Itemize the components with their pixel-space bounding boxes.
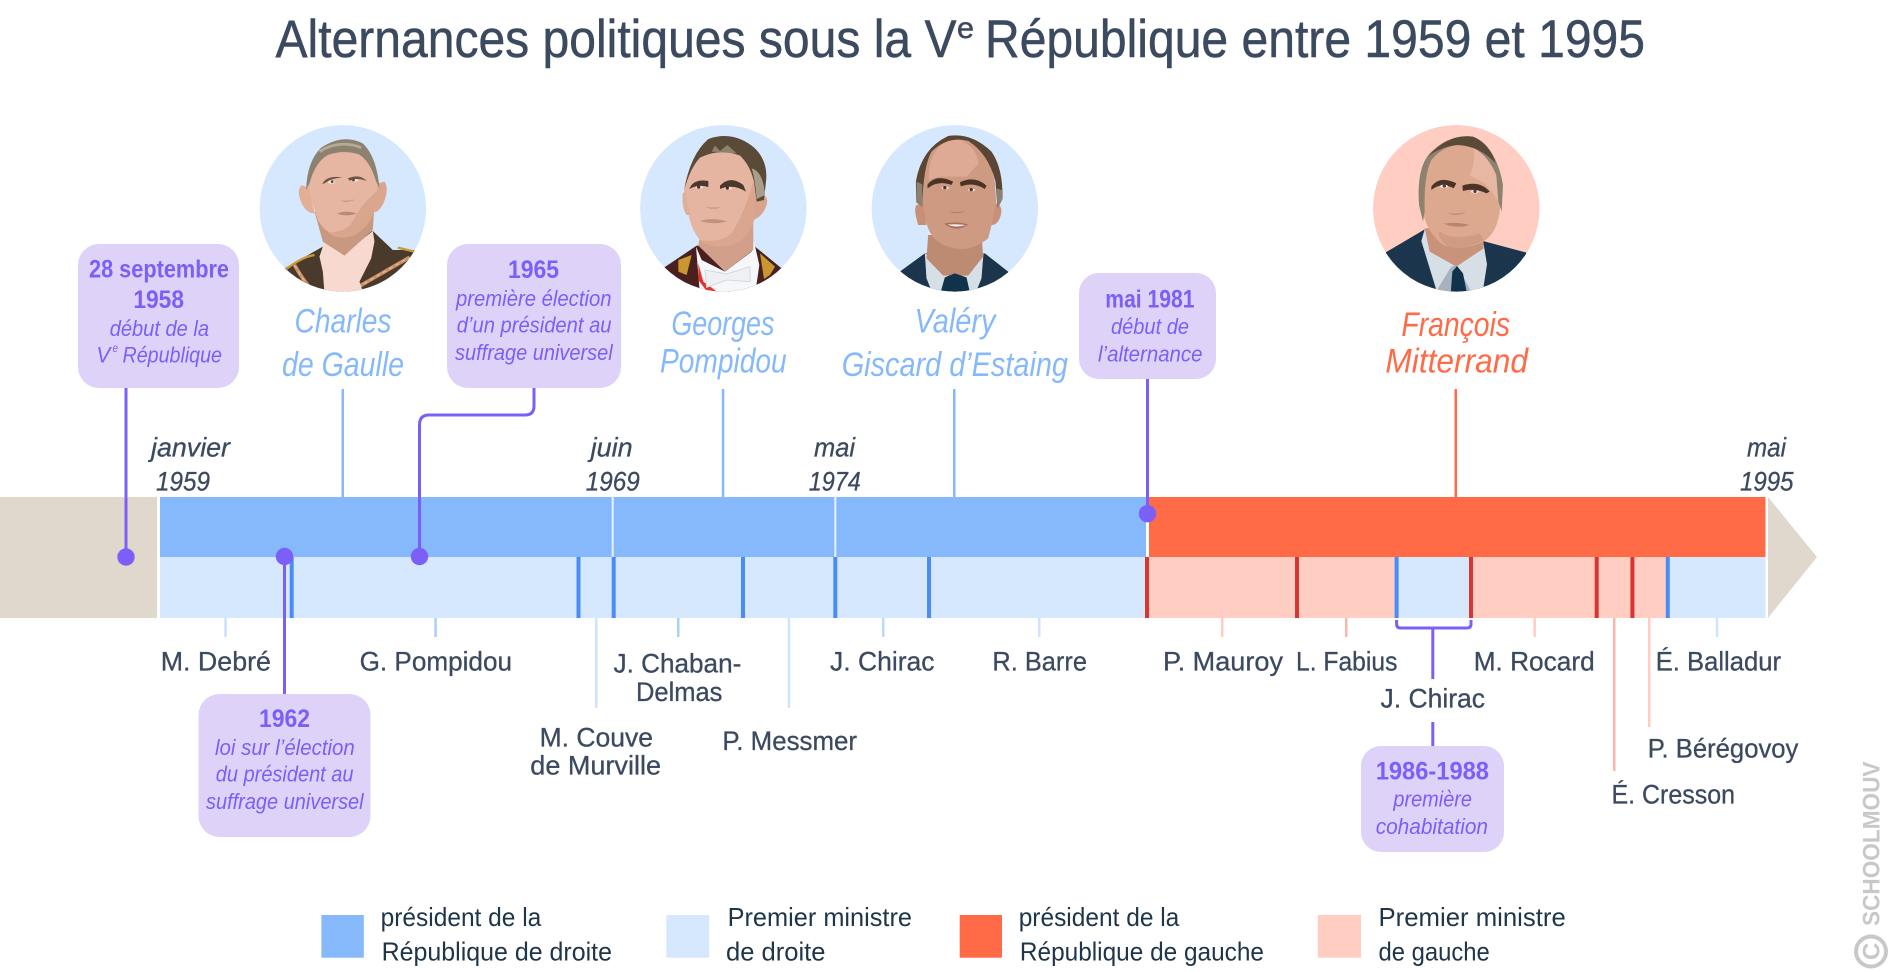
callout: 1965: d’un président au <box>457 313 612 338</box>
prime minister names: M. Couve <box>540 723 653 753</box>
callout: 1986-1988: cohabitation <box>1376 814 1488 839</box>
legend: Premier ministre de gauche: Premier ministre <box>1378 902 1566 932</box>
watermark: SCHOOLMOUV: C <box>1858 943 1886 960</box>
callout: mai 1981 <box>1079 273 1216 379</box>
callout: 1962 <box>198 694 370 837</box>
name: François Mitterrand: François <box>1401 306 1510 344</box>
callout: 1986-1988 <box>1361 746 1504 852</box>
title: e <box>957 12 974 45</box>
title: Alternances politiques sous la V <box>276 10 957 69</box>
prime minister names: J. Chirac <box>1380 684 1485 714</box>
prime minister ticks <box>224 618 1718 771</box>
callout: mai 1981: début de <box>1111 314 1189 339</box>
prime minister names: P. Messmer <box>722 726 857 756</box>
legend: président de gauche: président de la <box>1019 902 1180 932</box>
portrait: Valéry Giscard d'Estaing <box>872 125 1038 295</box>
date labels: 1995 <box>1740 467 1794 497</box>
name: François Mitterrand: Mitterrand <box>1385 343 1529 381</box>
callout: 1962: loi sur l’élection <box>215 735 355 760</box>
name: François Mitterrand <box>1385 306 1529 381</box>
connector: Mitterrand <box>1454 389 1457 497</box>
callout: mai 1981: l’alternance <box>1098 342 1202 367</box>
date labels <box>147 433 1794 497</box>
prime minister names: P. Bérégovoy <box>1648 733 1799 763</box>
portrait: Charles de Gaulle <box>260 125 426 295</box>
legend: Premier ministre de gauche: de gauche <box>1378 937 1490 967</box>
president band: right <box>160 497 1146 557</box>
title <box>276 10 1645 69</box>
title: République entre 1959 et 1995 <box>985 10 1645 69</box>
legend: président de droite: République de droite <box>382 937 612 967</box>
prime minister names: R. Barre <box>992 647 1087 677</box>
portrait: Georges Pompidou <box>640 125 807 295</box>
timeline bar <box>0 497 1817 618</box>
watermark: SCHOOLMOUV <box>1856 762 1886 966</box>
watermark: SCHOOLMOUV: SCHOOLMOUV <box>1858 762 1886 926</box>
legend: président de droite <box>321 902 612 967</box>
date labels: janvier <box>147 433 231 463</box>
prime minister names: J. Chaban- <box>614 649 741 679</box>
prime minister names: de Murville <box>530 750 661 780</box>
prime minister band <box>160 557 1766 618</box>
prime minister names: M. Rocard <box>1474 647 1595 677</box>
prime minister names <box>161 647 1799 809</box>
date labels: 1974 <box>809 467 861 497</box>
name: Georges Pompidou: Pompidou <box>660 343 787 381</box>
callout: 1965: 1965 <box>508 256 559 284</box>
name: Georges Pompidou: Georges <box>671 305 774 343</box>
arrow head <box>1768 497 1817 618</box>
callout: 28 septembre 1958 <box>78 244 239 388</box>
portrait: François Mitterrand <box>1373 125 1540 295</box>
president separators <box>612 497 836 557</box>
connector: 1962 <box>276 548 293 694</box>
callout: 1962: suffrage universel <box>206 789 365 814</box>
legend: Premier ministre de droite <box>666 902 912 967</box>
date labels: mai <box>814 433 856 463</box>
legend: président de gauche: République de gauche <box>1020 937 1264 967</box>
legend: président de droite: président de la <box>381 902 542 932</box>
callout: 1986-1988: première <box>1392 787 1472 812</box>
prime minister names: P. Mauroy <box>1163 647 1284 677</box>
callout: 1962: du président au <box>216 762 354 787</box>
connector: 1965 <box>411 388 534 565</box>
connector: 1958 <box>117 388 135 566</box>
legend: président de gauche <box>960 902 1264 967</box>
prime minister separators <box>290 557 1670 618</box>
callout: 1965: première élection <box>455 286 612 311</box>
name: Charles de Gaulle <box>282 303 404 384</box>
connector: Pompidou <box>722 389 724 497</box>
name: Valéry Giscard d'Estaing <box>842 303 1068 384</box>
prime minister names: Delmas <box>636 677 722 707</box>
callout: 28 septembre 1958: République <box>122 343 222 368</box>
legend <box>321 902 1566 967</box>
legend: Premier ministre de droite: de droite <box>726 937 826 967</box>
callout: mai 1981: mai 1981 <box>1105 286 1195 314</box>
prime minister names: J. Chirac <box>830 647 934 677</box>
date labels: mai <box>1747 433 1787 463</box>
callout: 28 septembre 1958: e <box>112 341 118 355</box>
name: Georges Pompidou <box>660 305 787 381</box>
prime minister names: É. Cresson <box>1612 779 1735 809</box>
callout: 28 septembre 1958: 28 septembre <box>89 255 229 283</box>
callout: 1965: suffrage universel <box>455 340 614 365</box>
date labels: 1959 <box>156 467 210 497</box>
name: Valéry Giscard d'Estaing: Giscard d’Estaing <box>842 346 1068 384</box>
legend: Premier ministre de droite: Premier ministre <box>728 902 912 932</box>
date labels: juin <box>587 433 633 463</box>
callout: 28 septembre 1958: V <box>96 343 113 368</box>
name: Valéry Giscard d'Estaing: Valéry <box>914 303 997 341</box>
date labels: 1969 <box>586 467 640 497</box>
legend: Premier ministre de gauche <box>1318 902 1566 967</box>
callout: 28 septembre 1958: début de la <box>110 316 209 341</box>
callout: 1986-1988: 1986-1988 <box>1376 757 1489 785</box>
callout: 1962: 1962 <box>259 705 310 733</box>
connector: Giscard <box>953 389 956 497</box>
connector: 1981 <box>1139 379 1156 522</box>
prime minister names: G. Pompidou <box>360 647 512 677</box>
prime minister names: L. Fabius <box>1296 647 1397 677</box>
president band: left <box>1149 497 1766 557</box>
name: Charles de Gaulle: Charles <box>294 303 392 341</box>
arrow base: before 1959 <box>0 497 157 618</box>
name: Charles de Gaulle: de Gaulle <box>282 346 404 384</box>
callout: 28 septembre 1958: 1958 <box>133 286 184 314</box>
prime minister names: M. Debré <box>161 647 271 677</box>
prime minister names: É. Balladur <box>1656 647 1781 677</box>
callout: 1965 <box>447 244 621 388</box>
bracket: cohabitation <box>1397 620 1471 746</box>
connector: de Gaulle <box>342 389 344 497</box>
